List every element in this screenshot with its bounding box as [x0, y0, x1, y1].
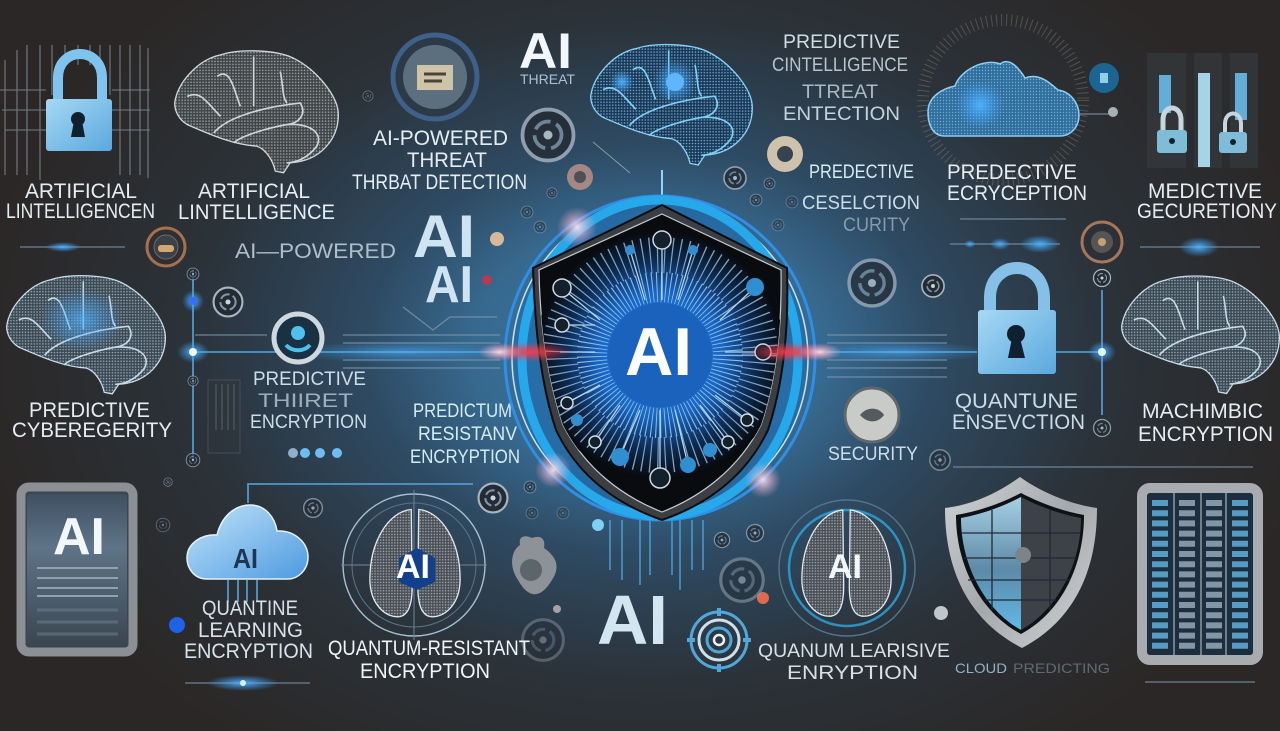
heading: security: SECURITY	[828, 444, 918, 465]
AI threat label: THREAT	[520, 71, 575, 87]
text: predictive intelligence	[772, 32, 908, 125]
icon: blue ring right	[1089, 63, 1119, 117]
heading: predictive cybersecurity: CYBEREGERITY	[12, 419, 172, 442]
shield blue nodes	[571, 245, 764, 473]
icon: target	[687, 608, 751, 672]
stacked AI labels: AI	[413, 203, 475, 270]
heading: artificial intelligence left: LINTELLIGENCEN	[6, 200, 155, 223]
icon: silver coin	[845, 388, 899, 442]
heading: quantum encryption right	[952, 390, 1085, 434]
heading: artificial intelligence left	[6, 180, 155, 223]
heading: medictive security: MEDICTIVE	[1148, 180, 1262, 203]
icon: rust ring left	[147, 228, 185, 266]
heading: medictive security	[1137, 180, 1277, 223]
cloud AI: AI	[233, 543, 258, 574]
text: predictive threat encryption: PREDICTIVE	[253, 369, 366, 390]
text: AI powered: AI—POWERED	[235, 240, 396, 263]
AI threat label: AI	[519, 23, 572, 79]
heading: machine encryption: ENCRYPTION	[1138, 423, 1273, 446]
cloud top right	[923, 20, 1083, 180]
heading: predective encryption	[947, 161, 1087, 205]
text: resistant encryption: ENCRYPTION	[410, 447, 520, 468]
text: predictive cesselection: PREDECTIVE	[809, 162, 914, 183]
lock top left with circuit	[0, 45, 150, 180]
AI tablet bottom left	[21, 487, 133, 652]
heading: machine encryption	[1138, 400, 1273, 446]
device dim	[208, 380, 240, 453]
brain scan right bottom: AI	[828, 548, 862, 586]
icon: beige eye	[767, 136, 803, 172]
blue shield ring	[505, 196, 815, 520]
label: cloud prediction: CLOUD	[955, 660, 1007, 676]
shield radial ticks	[560, 255, 760, 455]
heading: quantine learning encryption: LEARNING	[198, 619, 303, 642]
text: resistant encryption: RESISTANV	[418, 424, 517, 445]
brain scan left bottom: AI	[396, 548, 430, 586]
shield nodes	[553, 231, 771, 488]
heading: quantum learisive encryption: QUANUM LEARISIVE	[758, 641, 950, 662]
heading: predictive cybersecurity: PREDICTIVE	[29, 399, 150, 422]
glowing nodes	[45, 232, 1219, 691]
text: predictive cesselection: CESELCTION	[802, 193, 920, 214]
text: predictive threat encryption: ENCRYPTION	[250, 412, 367, 433]
shield core glow	[535, 230, 785, 480]
label: cloud prediction: PREDICTING	[1013, 660, 1110, 676]
heading: quantine learning encryption: ENCRYPTION	[184, 640, 313, 663]
glowing brain top center	[591, 45, 752, 165]
icon: main ring left	[274, 314, 322, 362]
text: predictive intelligence: PREDICTIVE	[783, 32, 900, 53]
text: predictive intelligence: TTREAT	[802, 82, 878, 103]
heading: quantum resistant encryption	[328, 637, 530, 683]
server panel right	[1142, 488, 1258, 660]
AI tablet bottom left: AI	[53, 508, 105, 566]
icon: locks and bars top right	[1147, 53, 1258, 168]
central shield	[533, 205, 787, 520]
text: predictive intelligence: ENTECTION	[783, 104, 900, 125]
heading: predictive cybersecurity	[12, 399, 172, 442]
heading: quantine learning encryption	[184, 597, 313, 663]
text: predictive cesselection: CURITY	[843, 215, 910, 236]
heading: quantum resistant encryption: QUANTUM-RESISTANT	[328, 637, 530, 660]
text: predictive cesselection	[802, 162, 920, 236]
shield circuit traces	[560, 250, 754, 468]
small circular icons	[156, 91, 1110, 660]
text: predictive threat encryption: THIIRET	[258, 391, 353, 412]
heading: quantine learning encryption: QUANTINE	[202, 597, 298, 620]
heading: quantum learisive encryption: ENRYPTION	[787, 663, 918, 684]
heading: artificial intelligence	[178, 180, 335, 224]
text: predictive threat encryption	[250, 369, 367, 433]
heading: quantum learisive encryption	[758, 641, 950, 684]
brain icon top left	[175, 51, 338, 173]
icon: rust ring right	[1082, 222, 1122, 262]
brain right	[1122, 276, 1279, 394]
connector lines	[20, 114, 1260, 683]
brain left	[7, 276, 165, 394]
text: predictive intelligence: CINTELLIGENCE	[772, 55, 908, 76]
text: resistant encryption: PREDICTUM	[413, 401, 512, 422]
big AI bottom: AI	[597, 581, 668, 659]
text: resistant encryption	[410, 401, 520, 468]
icon: peach ring	[567, 164, 593, 190]
heading: threat detection	[352, 127, 527, 194]
heading: predective encryption: PREDECTIVE	[947, 161, 1077, 184]
lock right	[978, 268, 1056, 374]
heading: artificial intelligence: LINTELLIGENCE	[178, 201, 335, 224]
icon: grey padlock emblem	[512, 536, 557, 594]
heading: artificial intelligence left: ARTIFICIAL	[25, 180, 137, 203]
stacked AI labels	[413, 203, 475, 314]
steel shield	[945, 477, 1097, 648]
AI core	[608, 303, 712, 407]
brain scan right bottom	[779, 500, 915, 636]
heading: quantum resistant encryption: ENCRYPTION	[360, 660, 490, 683]
heading: artificial intelligence: ARTIFICIAL	[198, 180, 310, 203]
stacked AI labels: AI	[425, 256, 473, 314]
heading: quantum encryption right: QUANTUNE	[955, 390, 1078, 413]
heading: threat detection: AI-POWERED	[373, 127, 508, 150]
red flares	[478, 342, 842, 362]
heading: threat detection: THREAT	[407, 149, 487, 172]
heading: machine encryption: MACHIMBIC	[1142, 400, 1263, 423]
heading: quantum encryption right: ENSEVCTION	[952, 411, 1085, 434]
brain scan left bottom	[341, 490, 487, 640]
heading: threat detection: THRBAT DETECTION	[352, 171, 527, 194]
cloud AI	[187, 505, 308, 579]
central shield: AI	[625, 314, 692, 390]
icon: threat badge	[393, 35, 477, 119]
heading: predective encryption: ECRYCEPTION	[947, 182, 1087, 205]
label: cloud prediction	[955, 660, 1110, 676]
